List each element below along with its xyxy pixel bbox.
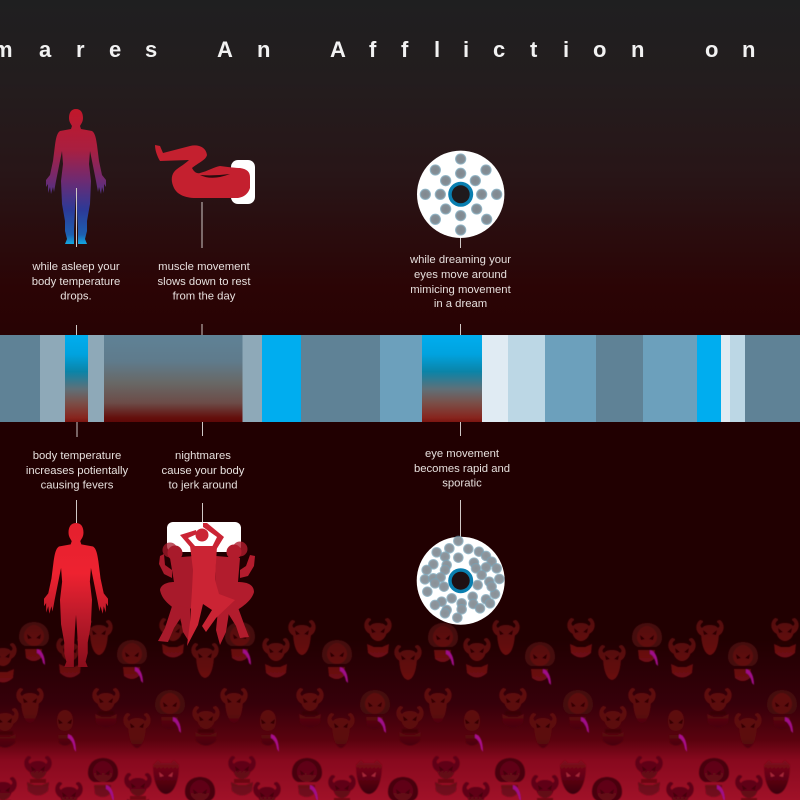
text: eyes mimic movement: in a dream <box>434 298 487 310</box>
text: body jerks: to jerk around <box>168 480 238 492</box>
text: body temperature drops: drops. <box>60 290 92 302</box>
icon: relaxed sleeper on pillow <box>155 145 255 204</box>
text: eyes mimic movement: mimicing movement <box>410 284 512 296</box>
text: eyes mimic movement: eyes move around <box>414 269 507 281</box>
sleep stage band <box>0 335 800 422</box>
text: fevers: increases potientally <box>26 465 129 477</box>
text: body jerks: nightmares <box>175 450 231 462</box>
icon: jerking sleeper on pillow <box>158 522 255 646</box>
demon row 2 <box>0 688 797 752</box>
text: rapid eye movement: becomes rapid and <box>414 463 510 475</box>
icon: calm eye <box>417 151 504 238</box>
icon: cold sleeping body <box>46 109 106 244</box>
icon: feverish body <box>44 523 108 667</box>
text: body jerks: cause your body <box>162 465 245 477</box>
text: fevers: body temperature <box>33 450 121 462</box>
text: muscle movement slows: from the day <box>173 290 236 302</box>
text: body temperature drops: while asleep your <box>31 261 120 273</box>
text: fevers: causing fevers <box>41 480 114 492</box>
text: rapid eye movement: sporatic <box>442 478 482 490</box>
demon row 1 <box>0 618 799 685</box>
text: body temperature drops: body temperature <box>32 276 120 288</box>
text: muscle movement slows: slows down to rest <box>158 276 251 288</box>
text: muscle movement slows: muscle movement <box>158 261 251 273</box>
icon: rapid eye <box>417 536 505 625</box>
demon row 3 <box>0 756 790 800</box>
connector lines <box>76 188 460 537</box>
text: eyes mimic movement: while dreaming your <box>409 254 511 266</box>
text: rapid eye movement: eye movement <box>425 448 500 460</box>
title: mares An Affliction on <box>0 37 755 62</box>
